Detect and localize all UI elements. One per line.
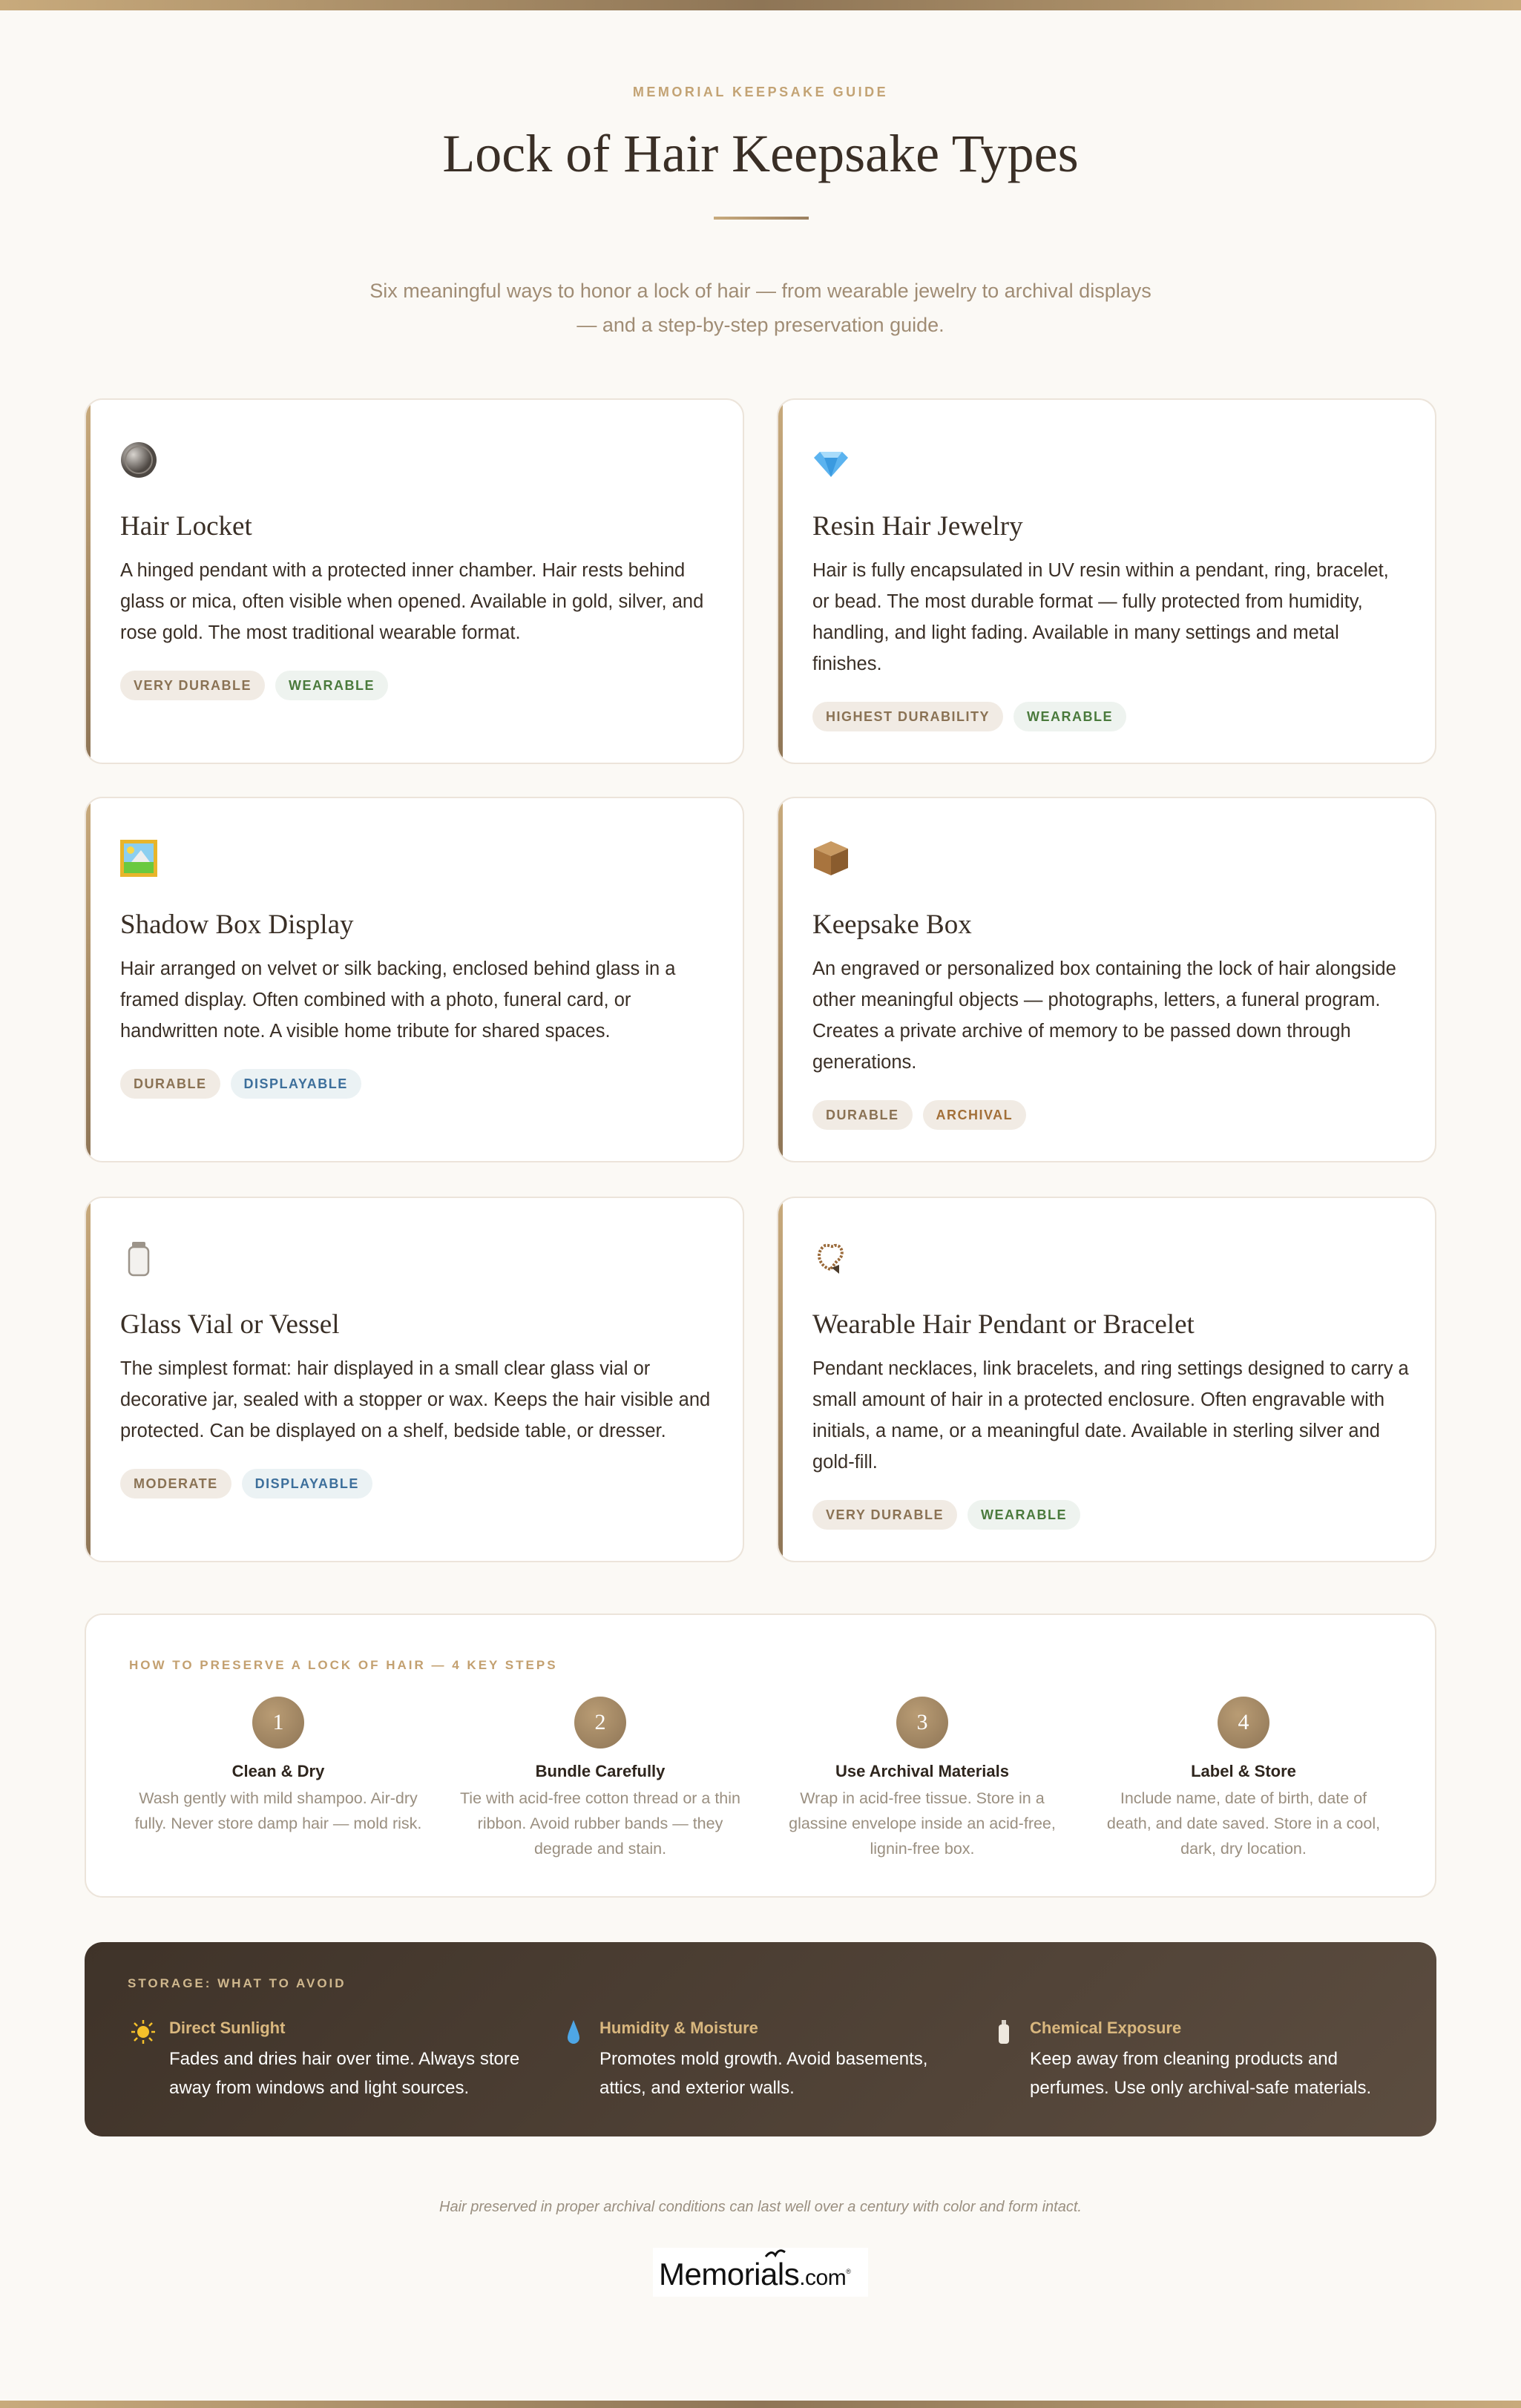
description: initials, a name, or a meaningful date. Available in sterling silver and	[812, 1421, 1380, 1441]
step 3: Use Archival Materials	[835, 1762, 1009, 1780]
description: A hinged pendant with a protected inner chamber. Hair rests behind	[120, 560, 685, 581]
description: Hair is fully encapsulated in UV resin within a pendant, ring, bracelet,	[812, 560, 1389, 581]
logo	[653, 2248, 868, 2297]
card: keepsake box	[777, 797, 1436, 1162]
footnote: Hair preserved in proper archival conditions can last well over a century with color and form intact.	[439, 2199, 1082, 2215]
tags	[812, 1500, 1080, 1530]
description	[812, 560, 1389, 674]
description: other meaningful objects — photographs, letters, a funeral program.	[812, 990, 1380, 1010]
step 1: 1	[273, 1710, 283, 1734]
avoid: sunlight: Fades and dries hair over time. Always store	[169, 2049, 519, 2069]
description: glass or mica, often visible when opened. Available in gold, silver, and	[120, 591, 703, 612]
icon: framed picture	[120, 840, 157, 877]
card: shadow box	[85, 797, 744, 1162]
avoid: chemicals: Keep away from cleaning products and	[1030, 2049, 1338, 2069]
tags: DISPLAYABLE	[255, 1476, 359, 1491]
tags	[120, 1469, 372, 1499]
step 2: degrade and stain.	[534, 1840, 666, 1858]
avoid: sunlight	[131, 2019, 519, 2098]
subtitle	[369, 280, 1152, 336]
card: glass vial	[85, 1197, 744, 1562]
description	[120, 560, 703, 643]
icon: jar	[128, 1242, 150, 1276]
description: Creates a private archive of memory to be passed down through	[812, 1021, 1351, 1042]
description: rose gold. The most traditional wearable format.	[120, 622, 521, 643]
card: hair locket	[85, 398, 744, 764]
heading: Shadow Box Display	[120, 909, 353, 940]
description: protected. Can be displayed on a shelf, bedside table, or dresser.	[120, 1421, 666, 1441]
description	[120, 958, 675, 1042]
step 2: Tie with acid-free cotton thread or a thin	[460, 1789, 740, 1807]
avoid: chemicals: perfumes. Use only archival-safe materials.	[1030, 2078, 1371, 2098]
description	[120, 1358, 710, 1441]
description: or bead. The most durable format — fully protected from humidity,	[812, 591, 1363, 612]
description	[812, 1358, 1409, 1473]
step 1: fully. Never store damp hair — mold risk.	[135, 1815, 421, 1832]
card: wearable pendant	[777, 1197, 1436, 1562]
tags: DISPLAYABLE	[243, 1076, 348, 1091]
panel: preservation steps	[85, 1613, 1436, 1898]
step 3: Wrap in acid-free tissue. Store in a	[800, 1789, 1045, 1807]
avoid: humidity: attics, and exterior walls.	[599, 2078, 795, 2098]
tags	[812, 702, 1126, 731]
description: The simplest format: hair displayed in a small clear glass vial or	[120, 1358, 650, 1379]
step 1: Clean & Dry	[232, 1762, 324, 1780]
subtitle: — and a step-by-step preservation guide.	[576, 314, 945, 336]
avoid: humidity: Humidity & Moisture	[599, 2019, 758, 2037]
heading: Resin Hair Jewelry	[812, 511, 1023, 542]
logo: Memorials.com®	[659, 2257, 850, 2292]
description: framed display. Often combined with a photo, funeral card, or	[120, 990, 631, 1010]
description: Pendant necklaces, link bracelets, and ring settings designed to carry a	[812, 1358, 1409, 1379]
tags	[120, 671, 388, 700]
description: gold-fill.	[812, 1452, 878, 1473]
step 4: 4	[1238, 1710, 1249, 1734]
avoid: chemicals: Chemical Exposure	[1030, 2019, 1181, 2037]
tags: DURABLE	[826, 1108, 899, 1122]
tags: DURABLE	[134, 1076, 206, 1091]
avoid: sunlight: away from windows and light sources.	[169, 2078, 469, 2098]
panel: storage what to avoid	[85, 1942, 1436, 2136]
description: An engraved or personalized box containing the lock of hair alongside	[812, 958, 1396, 979]
description: handling, and light fading. Available in many settings and metal	[812, 622, 1339, 643]
icon: locket coin	[121, 442, 157, 478]
description: Hair arranged on velvet or silk backing, enclosed behind glass in a	[120, 958, 675, 979]
step 2: 2	[595, 1710, 605, 1734]
description: generations.	[812, 1052, 916, 1073]
avoid heading: STORAGE: WHAT TO AVOID	[128, 1976, 346, 1990]
tags: WEARABLE	[289, 678, 375, 693]
tags	[812, 1100, 1026, 1130]
step 1	[135, 1697, 421, 1832]
step 4: Include name, date of birth, date of	[1120, 1789, 1367, 1807]
heading: Hair Locket	[120, 511, 252, 542]
description: small amount of hair in a protected enclosure. Often engravable with	[812, 1389, 1384, 1410]
avoid: sunlight: Direct Sunlight	[169, 2019, 285, 2037]
icon: box	[814, 841, 848, 875]
avoid: chemicals	[999, 2019, 1371, 2098]
heading: Wearable Hair Pendant or Bracelet	[812, 1309, 1195, 1340]
kicker: MEMORIAL KEEPSAKE GUIDE	[633, 85, 888, 99]
icon: beads	[818, 1243, 844, 1274]
title: Lock of Hair Keepsake Types	[442, 124, 1079, 183]
tags: VERY DURABLE	[134, 678, 252, 693]
heading: Keepsake Box	[812, 909, 972, 940]
step 4: death, and date saved. Store in a cool,	[1107, 1815, 1380, 1832]
tags: VERY DURABLE	[826, 1507, 944, 1522]
tags: WEARABLE	[981, 1507, 1067, 1522]
description: handwritten note. A visible home tribute for shared spaces.	[120, 1021, 611, 1042]
steps heading: HOW TO PRESERVE A LOCK OF HAIR — 4 KEY STEPS	[129, 1658, 558, 1672]
tags: ARCHIVAL	[936, 1108, 1013, 1122]
step 2: ribbon. Avoid rubber bands — they	[478, 1815, 723, 1832]
tags: MODERATE	[134, 1476, 218, 1491]
description: decorative jar, sealed with a stopper or wax. Keeps the hair visible and	[120, 1389, 710, 1410]
icon: gem	[814, 452, 848, 477]
step 3: glassine envelope inside an acid-free,	[789, 1815, 1056, 1832]
step 4: Label & Store	[1191, 1762, 1296, 1780]
card: resin hair jewelry	[777, 398, 1436, 764]
step 3: 3	[917, 1710, 927, 1734]
step 4	[1107, 1697, 1380, 1858]
tags: WEARABLE	[1027, 709, 1113, 724]
tags	[120, 1069, 361, 1099]
description: finishes.	[812, 654, 882, 674]
step 3: lignin-free box.	[870, 1840, 975, 1858]
avoid: humidity: Promotes mold growth. Avoid basements,	[599, 2049, 927, 2069]
step 2: Bundle Carefully	[536, 1762, 665, 1780]
step 4: dark, dry location.	[1180, 1840, 1307, 1858]
subtitle: Six meaningful ways to honor a lock of hair — from wearable jewelry to archival displays	[369, 280, 1152, 302]
avoid: humidity	[568, 2019, 927, 2098]
step 1: Wash gently with mild shampoo. Air-dry	[139, 1789, 418, 1807]
heading: Glass Vial or Vessel	[120, 1309, 339, 1340]
step 2	[460, 1697, 740, 1858]
tags: HIGHEST DURABILITY	[826, 709, 990, 724]
description	[812, 958, 1396, 1073]
step 3	[789, 1697, 1056, 1858]
